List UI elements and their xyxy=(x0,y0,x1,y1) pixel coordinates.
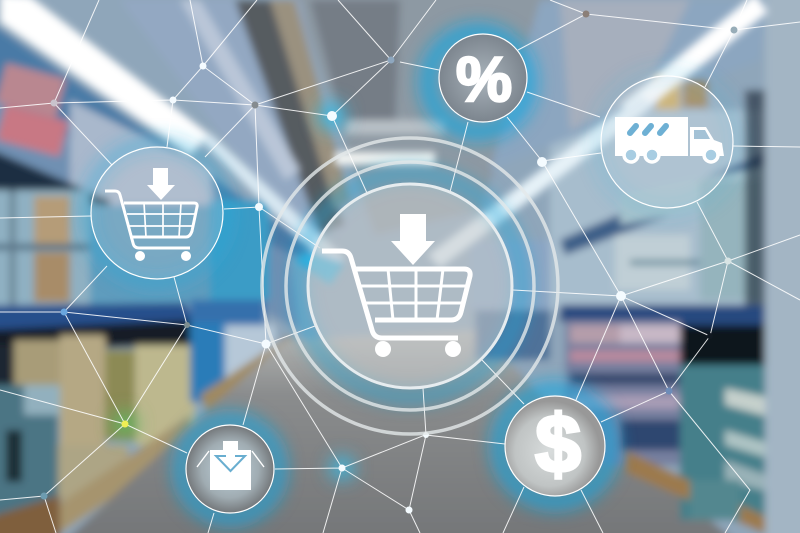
central ring target xyxy=(262,138,558,434)
cyan glows behind icons xyxy=(87,32,737,518)
icon: percent lens xyxy=(439,34,527,122)
icon: percent lens: % xyxy=(456,45,512,115)
icon: large shopping cart xyxy=(322,214,470,357)
icon: small cart lens xyxy=(91,147,223,279)
glowing light streaks xyxy=(0,0,768,285)
inner lens xyxy=(308,184,512,388)
icon: download box lens xyxy=(186,425,274,513)
outer ring xyxy=(262,138,558,434)
middle ring xyxy=(286,162,534,410)
icon: dollar lens xyxy=(505,396,605,496)
icon: dollar lens: $ xyxy=(535,399,581,490)
icon: delivery truck lens xyxy=(601,76,733,208)
icon: large down arrow xyxy=(391,214,435,265)
